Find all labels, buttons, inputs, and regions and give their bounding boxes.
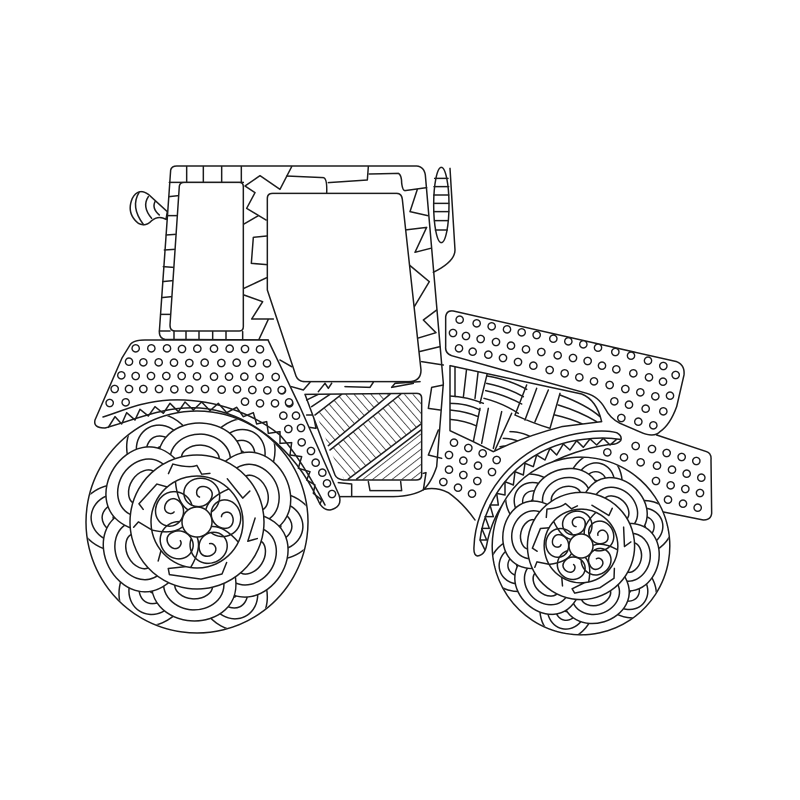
front fender zigzag trim [480,438,617,550]
panel: front fender [474,431,621,556]
grille hatch lower [357,430,421,479]
panel: front lower bonnet [440,435,712,520]
rear wheel [61,385,333,659]
front wheel [466,431,696,661]
panel: rear fender [95,340,340,510]
fender band outer arc [103,400,325,505]
body ornament shapes [307,382,443,496]
panel: radiator grille [305,393,422,480]
fender strip inner line [480,438,620,540]
grille hatch upper [317,394,390,446]
bonnet dots [604,442,705,511]
panel: cab frame [159,166,443,383]
cab ornamental shapes [244,167,443,392]
panel: front windscreen [267,193,421,382]
lower body dots [440,439,500,497]
fender dot row group [106,345,293,407]
strap dots [278,386,336,498]
icon: exhaust pipe [433,167,455,272]
icon: side mirror [130,192,167,225]
panel: engine body [307,382,475,520]
grille hatch middle [330,394,421,479]
hood dots [449,316,679,429]
panel: rear side window [170,182,243,331]
panel: engine side stripes [450,366,602,452]
fender zigzag trim [108,402,322,504]
tractor illustration [61,166,712,661]
panel: hood [446,311,684,435]
cab left frame ticks [159,167,243,339]
